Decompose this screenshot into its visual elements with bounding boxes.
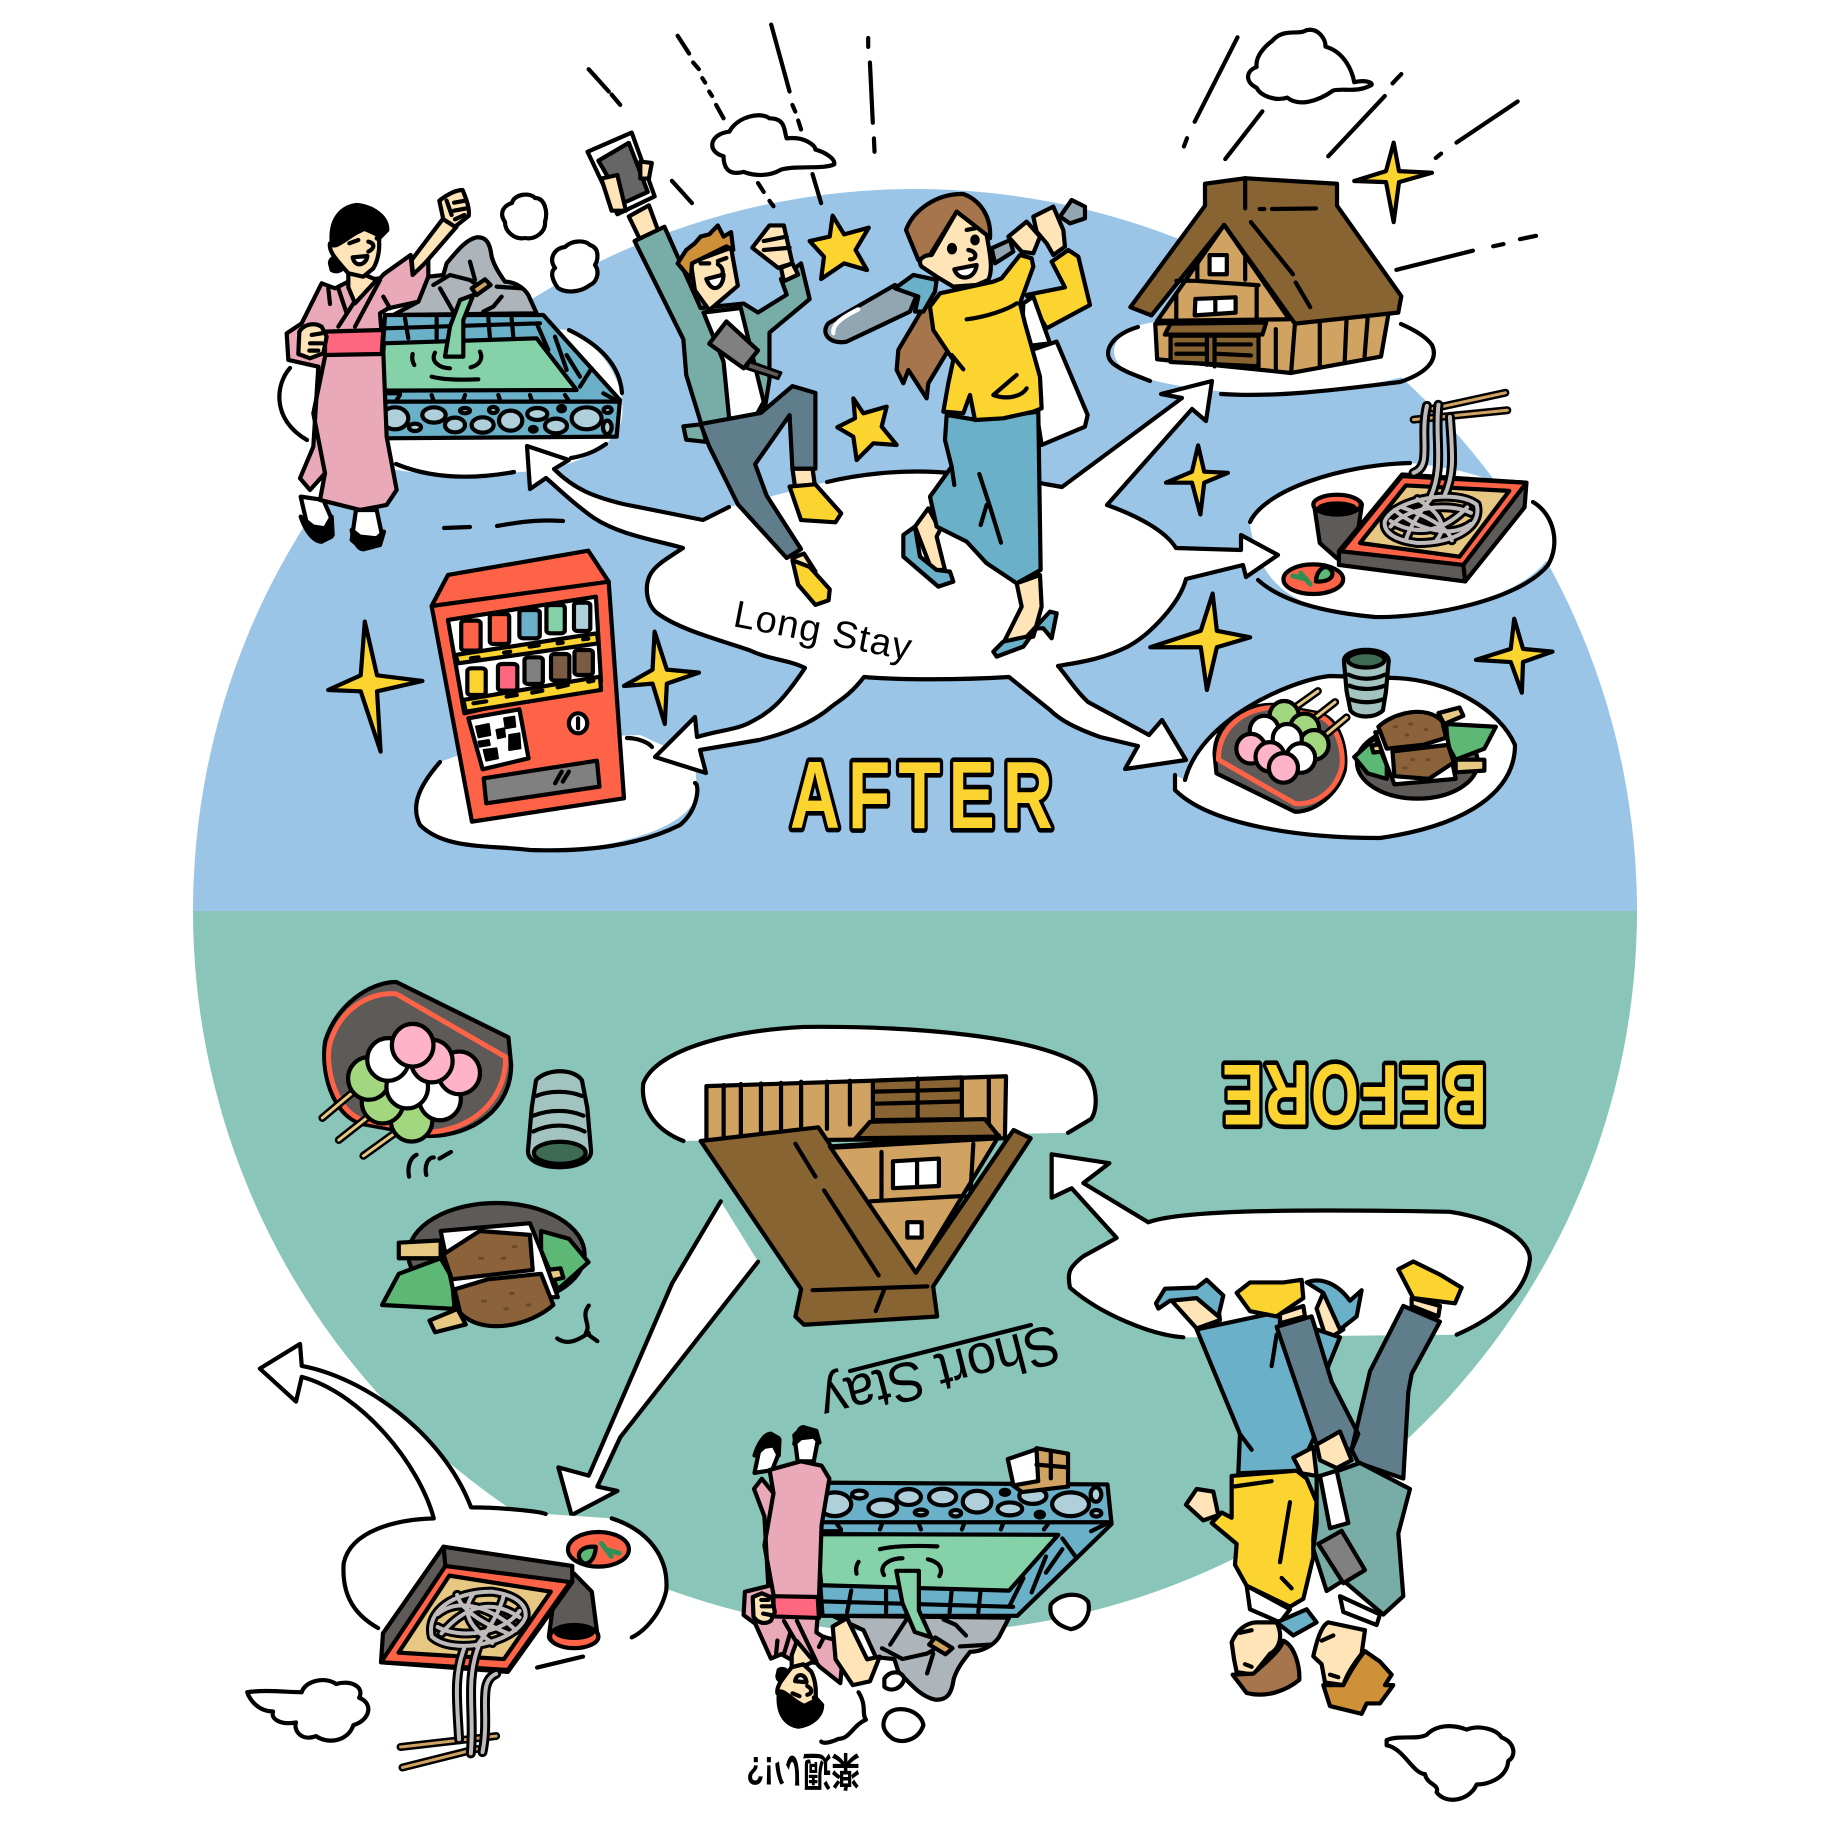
callout: before bubble white fill with arrow to house — [1052, 1154, 1530, 1337]
icon: sparkle far right — [1476, 619, 1552, 693]
icon: upside-down soba — [381, 1532, 629, 1768]
skirt — [930, 412, 1041, 583]
icon: tea cup — [1344, 650, 1389, 716]
trousers — [1277, 1306, 1440, 1479]
icon: sparkle near house — [1354, 143, 1432, 222]
plate outline — [416, 738, 697, 850]
scene: thatched house on plate — [1108, 178, 1435, 395]
walls — [706, 1076, 1006, 1141]
man shirt — [1320, 1471, 1380, 1625]
hand and forearm — [601, 162, 659, 240]
hands — [1008, 207, 1065, 255]
cloud: bottom left — [247, 1680, 368, 1741]
icon: mochi skewers — [1354, 708, 1496, 799]
jacket — [635, 227, 810, 442]
far sleeve — [1027, 250, 1090, 328]
cloud: top right — [1248, 30, 1372, 102]
icon: onsen pool and mountain — [380, 237, 620, 438]
label: Long Stay: Long Stay — [730, 594, 915, 669]
icon: upside-down house — [701, 1076, 1031, 1325]
head and hair — [691, 248, 738, 310]
yellow blouse — [1212, 1471, 1317, 1607]
figures: upside-down couple — [1156, 1262, 1462, 1714]
heading: AFTER: AFTER — [790, 741, 1053, 849]
man head — [1313, 1622, 1365, 1685]
figure: flipped kimono lady — [744, 1427, 854, 1727]
icon: flipped onsen — [816, 1483, 1112, 1700]
cloud: top centre — [712, 115, 834, 175]
scarf — [895, 275, 937, 312]
plate: soba in before with outgoing arrow — [260, 1344, 667, 1668]
windows — [893, 1159, 939, 1188]
motion rays top centre — [589, 25, 875, 206]
label: Short Stay upside down: Short Stay — [814, 1312, 1067, 1435]
raised fist — [752, 225, 798, 281]
legs — [915, 508, 1042, 643]
icon: upside-down dango — [322, 982, 511, 1156]
label: handwritten exclamation upside down: 楽週い!? — [746, 1748, 860, 1793]
figure: flipped lady lowered arm — [833, 1618, 880, 1685]
heels — [903, 527, 1057, 657]
phone — [588, 133, 655, 214]
scene: dango and mochi on plate — [1175, 650, 1515, 838]
trousers — [701, 386, 815, 558]
icon: sparkle left of vending machine — [328, 622, 422, 752]
icon: star lower — [837, 398, 897, 460]
man bag — [1318, 1531, 1365, 1583]
vending machine body — [432, 551, 624, 822]
panel: background circle top half (after) — [193, 189, 1637, 911]
icon: upside-down mochi — [382, 1203, 589, 1332]
figure: man with phone — [588, 133, 841, 605]
gable — [830, 1136, 999, 1273]
white plate — [1250, 463, 1555, 618]
man jacket — [1313, 1463, 1410, 1615]
arrow: house to soba — [558, 1201, 758, 1515]
panel: background circle bottom half (before) — [193, 911, 1637, 1633]
white plate — [1114, 300, 1435, 394]
callout: central Long Stay bubble with five arrows — [527, 381, 1278, 773]
figure: lady in pink kimono — [287, 205, 428, 549]
bat — [825, 285, 917, 342]
heading: BEFORE upside down: BEFORE — [1222, 1047, 1487, 1143]
blue heels — [1156, 1280, 1362, 1329]
yellow shoes and ankles — [792, 469, 815, 571]
plate: house in before — [643, 1027, 1096, 1141]
plate outline — [1108, 324, 1434, 395]
tote bag — [1022, 297, 1050, 347]
white shirt — [703, 308, 764, 420]
dashed motion lines under lady — [444, 521, 563, 528]
underline for Short Stay — [850, 1325, 1031, 1371]
roof — [701, 1127, 1031, 1325]
hair top — [906, 194, 990, 260]
yellow shoes — [1280, 1298, 1440, 1323]
skin ankles — [1172, 1293, 1343, 1340]
steam puff — [502, 195, 546, 238]
icon: sparkle large — [1150, 593, 1250, 690]
skirt — [1197, 1314, 1340, 1473]
scene: soba on plate — [1250, 393, 1555, 618]
icon: dango plate — [1215, 691, 1347, 812]
icon: upside-down cup — [528, 1071, 591, 1167]
onsen white plate — [276, 320, 623, 475]
scene: vending machine — [415, 551, 697, 850]
steam puffs and squiggles — [408, 1152, 1089, 1743]
louvred door — [873, 1077, 962, 1120]
icon: thatched house — [1130, 178, 1401, 373]
figure: lady raised arm — [412, 190, 469, 277]
icon: sparkle by arrows — [1166, 445, 1228, 514]
icon: soba tray, cup, wasabi — [1283, 393, 1526, 594]
icon: star upper — [810, 216, 869, 279]
face — [920, 212, 991, 287]
callout: before bubble outline — [1052, 1154, 1530, 1337]
crossbody bag — [709, 321, 758, 368]
white plate — [1175, 676, 1515, 838]
woman head — [1232, 1622, 1280, 1675]
collar — [1247, 1586, 1290, 1622]
ponytail — [897, 297, 948, 398]
figure: woman swinging bat — [825, 194, 1090, 657]
cloud: bottom right — [1387, 1726, 1513, 1800]
icon: sparkle right of vending machine — [624, 632, 699, 724]
motion rays top right — [1184, 37, 1536, 270]
icon: wooden bucket with towel — [1008, 1448, 1068, 1492]
white plate — [415, 735, 696, 850]
fists — [1186, 1431, 1352, 1520]
plate outline — [1250, 463, 1554, 617]
steam puff 2 — [552, 241, 597, 291]
plate outline strokes — [279, 330, 622, 477]
yellow blouse — [930, 255, 1042, 420]
scene: onsen on white plate with kimono lady — [276, 190, 623, 549]
